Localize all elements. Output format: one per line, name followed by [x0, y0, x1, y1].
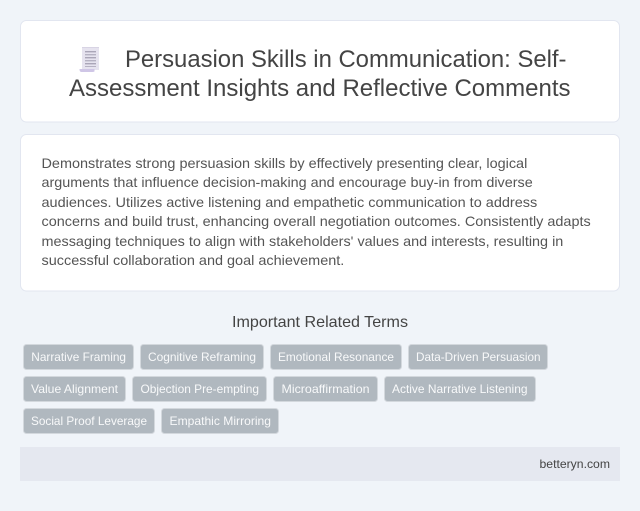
- tag: Data-Driven Persuasion: [408, 344, 548, 370]
- tag: Active Narrative Listening: Active Narrative Listening: [392, 382, 528, 396]
- icon: paper scroll: [80, 47, 99, 72]
- tag: Microaffirmation: [274, 376, 378, 402]
- tag: Social Proof Leverage: Social Proof Leverage: [31, 414, 147, 428]
- tag: Narrative Framing: [24, 344, 134, 370]
- tag: Social Proof Leverage: [24, 408, 154, 434]
- description text: concerns and build trust, enhancing overall negotiation outcomes. Consistently adapts: [42, 213, 591, 229]
- description text: successful collaboration and goal achievement.: [42, 252, 344, 268]
- tag: Cognitive Reframing: Cognitive Reframing: [148, 350, 256, 364]
- footer bar: [20, 447, 620, 481]
- tag: Active Narrative Listening: [384, 376, 536, 402]
- heading: important related terms: Important Related Terms: [232, 314, 408, 331]
- title line 1: Persuasion Skills in Communication: Self-: [125, 46, 566, 73]
- tag: Value Alignment: Value Alignment: [31, 382, 119, 396]
- title line 2: Assessment Insights and Reflective Comments: [69, 75, 570, 102]
- description text: [42, 155, 591, 268]
- description text: Demonstrates strong persuasion skills by effectively presenting clear, logical: [42, 155, 527, 171]
- description text: audiences. Utilizes active listening and empathetic communication to address: [42, 194, 537, 210]
- tag: Empathic Mirroring: [162, 408, 278, 434]
- description text: arguments that influence decision-making and encourage buy-in from diverse: [42, 174, 533, 190]
- tag: Objection Pre-empting: Objection Pre-empting: [140, 382, 259, 396]
- footer source text: betteryn.com: [540, 457, 610, 471]
- tag: Data-Driven Persuasion: Data-Driven Persuasion: [416, 350, 540, 364]
- tag: Value Alignment: [24, 376, 126, 402]
- tag: Emotional Resonance: Emotional Resonance: [278, 350, 394, 364]
- tag: Microaffirmation: Microaffirmation: [282, 382, 370, 396]
- tag: Empathic Mirroring: Empathic Mirroring: [170, 414, 271, 428]
- tag: Objection Pre-empting: [132, 376, 266, 402]
- description text: messaging techniques to align with stakeholders' values and interests, resulting in: [42, 233, 563, 249]
- tag: Narrative Framing: Narrative Framing: [31, 350, 126, 364]
- panel: header card: [20, 20, 620, 122]
- tag: Emotional Resonance: [270, 344, 402, 370]
- tag: Cognitive Reframing: [140, 344, 264, 370]
- panel: description card: [20, 134, 620, 291]
- tag group: [24, 344, 548, 434]
